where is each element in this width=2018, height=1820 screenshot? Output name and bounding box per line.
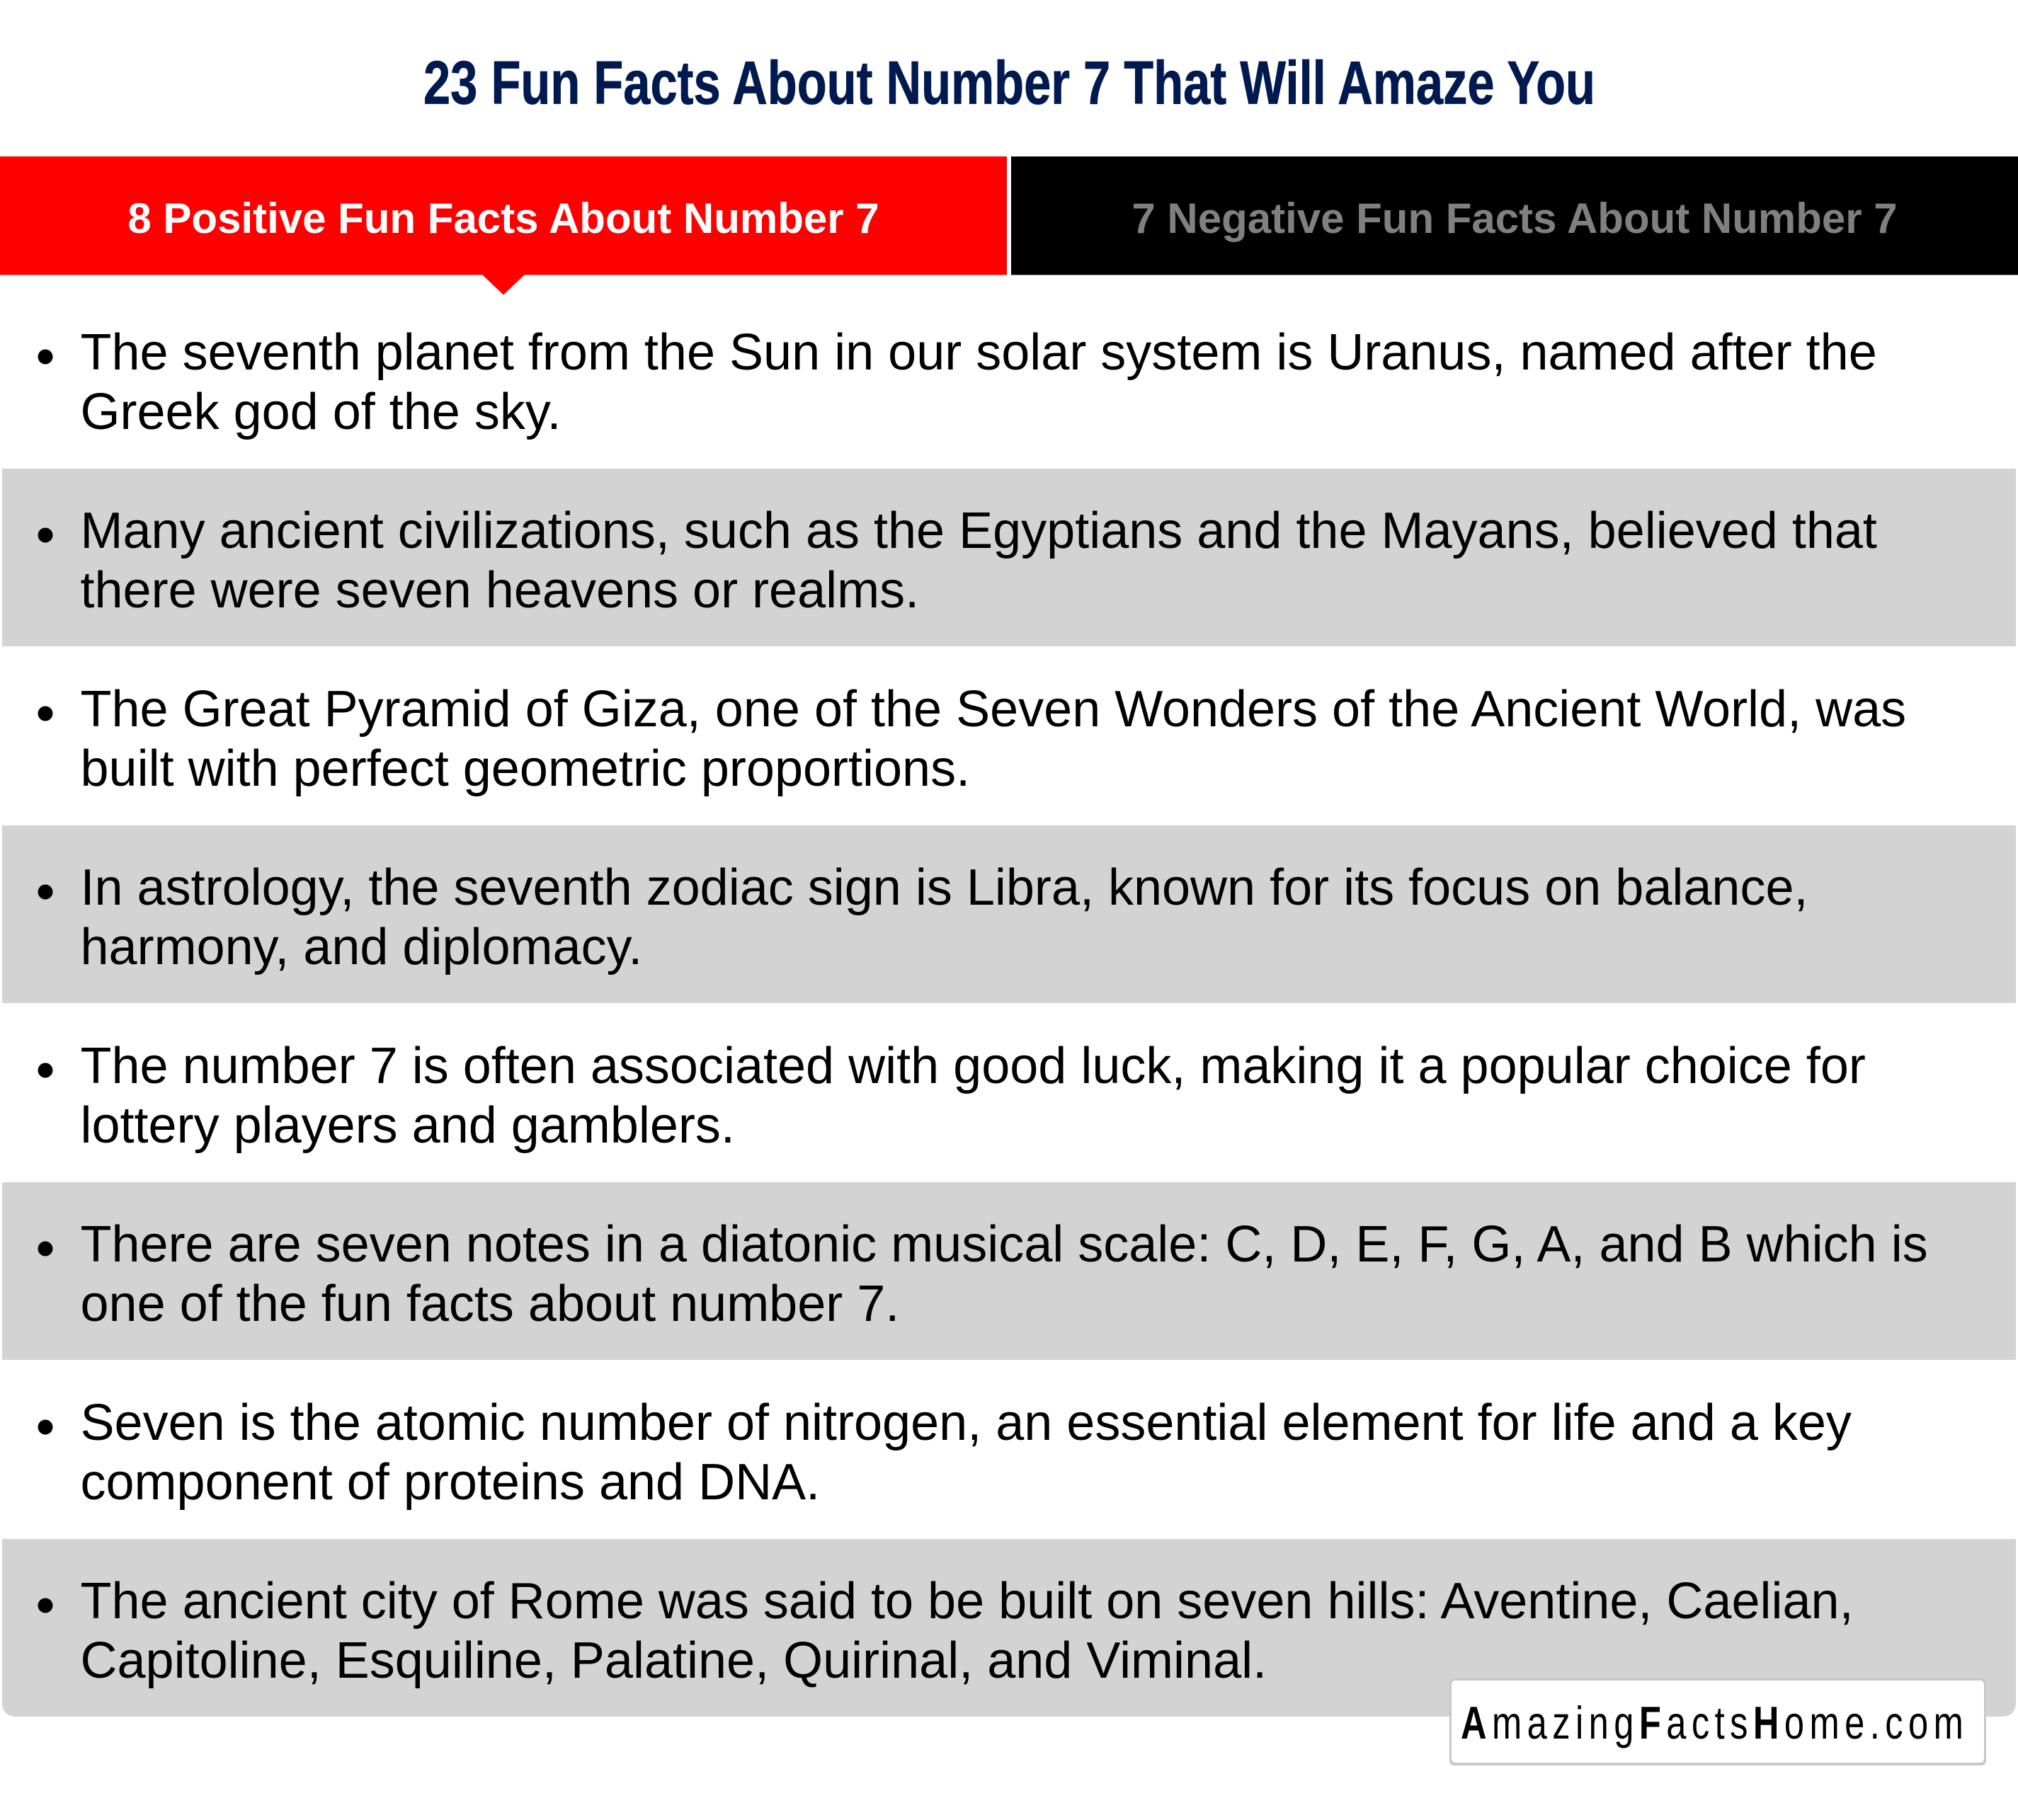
tab label: negative: 7 Negative Fun Facts About Number 7 [1131, 195, 1898, 242]
list item 2: there were seven heavens or realms. [81, 562, 919, 619]
list item 5: lottery players and gamblers. [81, 1097, 735, 1154]
list item 2 [2, 469, 2016, 646]
list item 2: Many ancient civilizations, such as the Egyptians and the Mayans, believed that [81, 503, 1877, 559]
list item 4 [2, 825, 2016, 1003]
watermark badge: AmazingFactsHome.com [1461, 1698, 1968, 1749]
tab: positive facts (active) [0, 156, 1007, 294]
list item 7 [38, 1395, 1852, 1511]
list item 7: Seven is the atomic number of nitrogen, an essential element for life and a key [81, 1395, 1852, 1451]
list item 4: In astrology, the seventh zodiac sign is Libra, known for its focus on balance, [81, 859, 1808, 916]
tab label: positive: 8 Positive Fun Facts About Number 7 [127, 195, 879, 242]
list item 1: Greek god of the sky. [81, 384, 561, 440]
title: 23 Fun Facts About Number 7 That Will Amaze You [423, 50, 1595, 118]
list item 8: Capitoline, Esquiline, Palatine, Quirinal, and Viminal. [81, 1632, 1267, 1689]
list item 3: The Great Pyramid of Giza, one of the Seven Wonders of the Ancient World, was [81, 681, 1906, 738]
icon: tab pointer [482, 275, 525, 294]
list item 7: component of proteins and DNA. [81, 1454, 820, 1511]
list item 5: The number 7 is often associated with good luck, making it a popular choice for [81, 1038, 1866, 1094]
list item 3 [38, 681, 1906, 797]
tab: negative facts [1011, 156, 2018, 275]
list item 1: The seventh planet from the Sun in our solar system is Uranus, named after the [81, 324, 1877, 381]
watermark badge [1449, 1678, 1986, 1765]
list item 4: harmony, and diplomacy. [81, 919, 642, 975]
list item 6: one of the fun facts about number 7. [81, 1276, 899, 1332]
panel: positive facts list [2, 324, 2016, 1717]
list item 1 [38, 324, 1877, 440]
list item 6 [2, 1182, 2016, 1360]
list item 6: There are seven notes in a diatonic musical scale: C, D, E, F, G, A, and B which is [81, 1216, 1928, 1273]
list item 3: built with perfect geometric proportions. [81, 740, 970, 797]
list item 8 [2, 1539, 2016, 1717]
list item 5 [38, 1038, 1866, 1154]
list item 8: The ancient city of Rome was said to be built on seven hills: Aventine, Caelian, [81, 1573, 1854, 1630]
